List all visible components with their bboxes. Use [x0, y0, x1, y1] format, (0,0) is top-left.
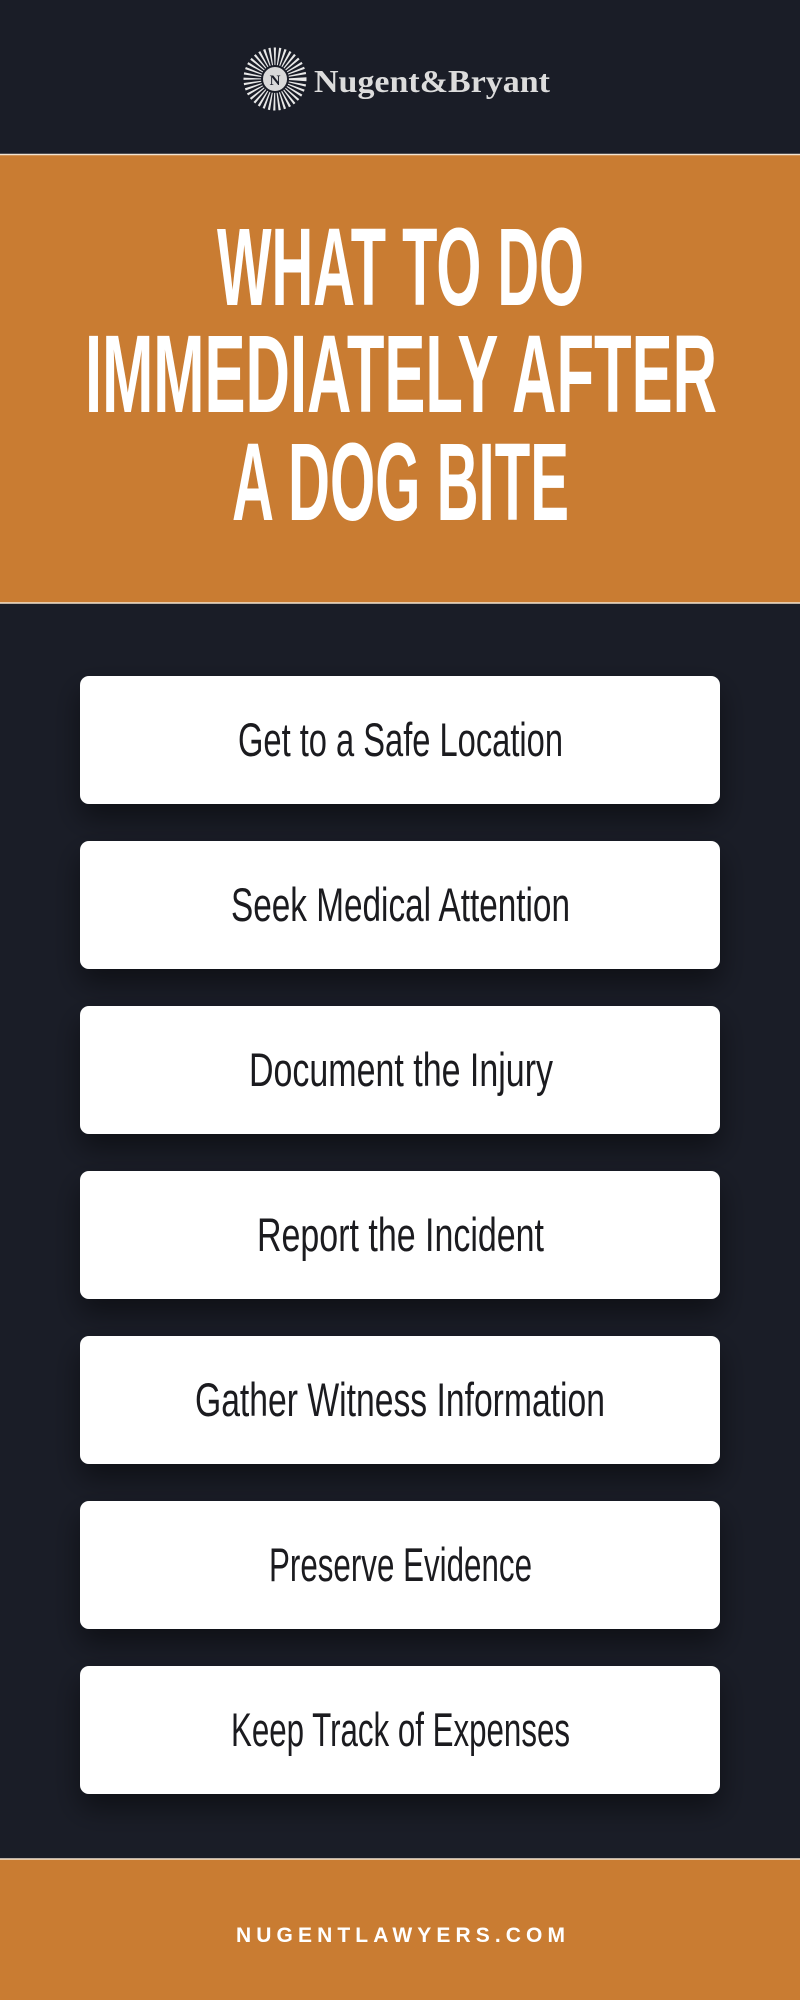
card: Preserve Evidence: Preserve Evidence	[269, 1538, 532, 1591]
card: Get to a Safe Location: Get to a Safe Location	[238, 713, 563, 766]
card: Report the Incident	[80, 1171, 720, 1299]
card: Keep Track of Expenses: Keep Track of Expenses	[231, 1703, 570, 1756]
card: Seek Medical Attention: Seek Medical Attention	[231, 878, 570, 931]
title	[85, 206, 717, 544]
card: Get to a Safe Location	[80, 676, 720, 804]
card: Document the Injury: Document the Injury	[249, 1043, 553, 1096]
icon: sunburst	[253, 57, 297, 101]
card: Keep Track of Expenses	[80, 1666, 720, 1794]
steps list	[80, 676, 720, 1794]
card: Preserve Evidence	[80, 1501, 720, 1629]
card: Document the Injury	[80, 1006, 720, 1134]
icon: sunburst: N	[270, 73, 281, 89]
logo	[253, 57, 550, 101]
card: Gather Witness Information: Gather Witness Information	[195, 1373, 605, 1426]
footer url: NUGENTLAWYERS.COM	[236, 1924, 565, 1947]
card: Report the Incident: Report the Incident	[257, 1208, 544, 1261]
card: Gather Witness Information	[80, 1336, 720, 1464]
footer	[0, 1859, 800, 2000]
card: Seek Medical Attention	[80, 841, 720, 969]
title band	[0, 154, 800, 603]
logo text: Nugent&Bryant	[314, 63, 550, 99]
